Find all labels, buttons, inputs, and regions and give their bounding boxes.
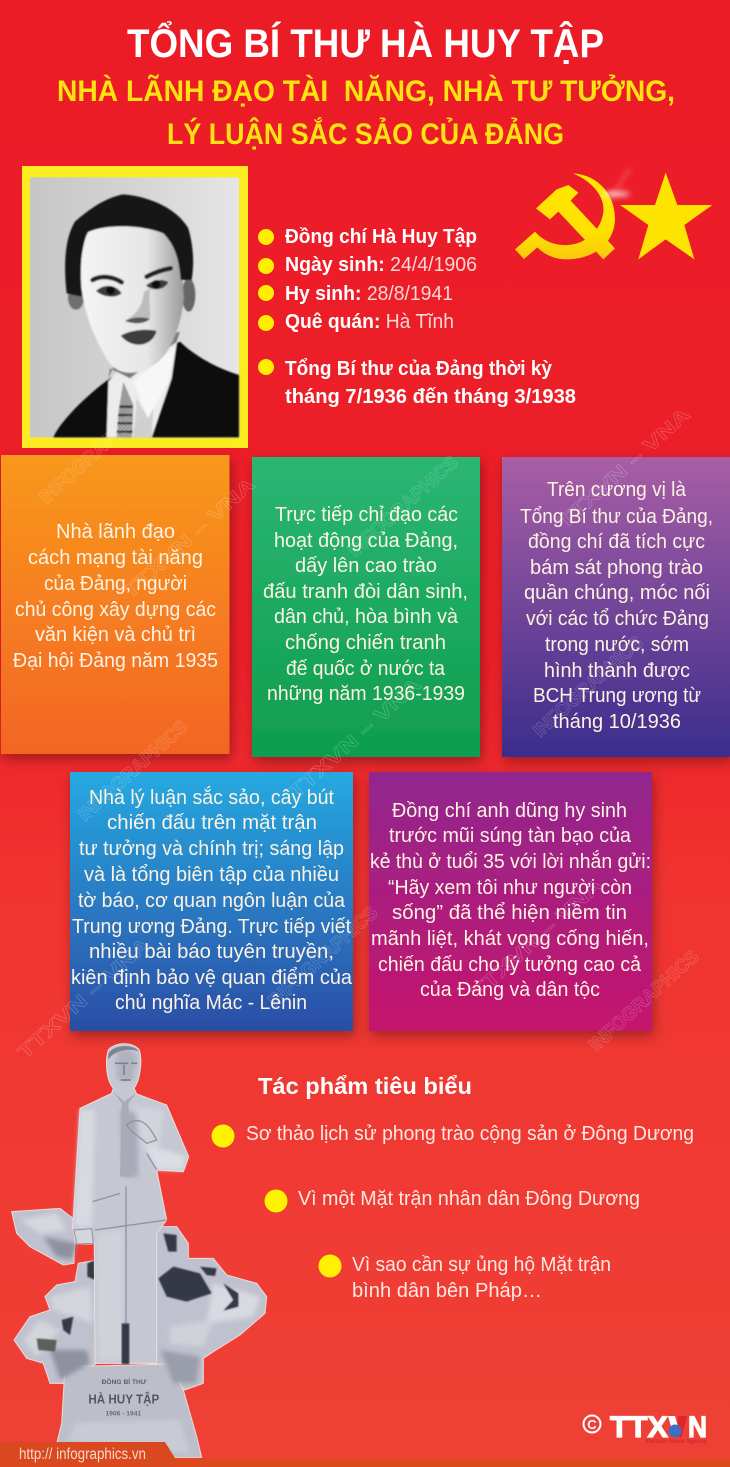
title: LÝ LUẬN SẮC SẢO CỦA ĐẢNG <box>167 117 564 151</box>
profile facts: Hy sinh: 28/8/1941 <box>285 283 453 305</box>
panel: green direction: đế quốc ở nước ta <box>286 657 446 680</box>
panel: blue theorist: và là tổng biên tập của nhiều <box>84 863 339 886</box>
panel: magenta sacrifice: “Hãy xem tôi như người còn <box>388 876 632 899</box>
light flare <box>602 168 630 206</box>
panel: blue theorist: Nhà lý luận sắc sảo, cây bút <box>89 786 334 809</box>
panel: magenta sacrifice: Đồng chí anh dũng hy sinh <box>392 799 627 822</box>
panel: purple general secretary: BCH Trung ương từ <box>533 684 701 707</box>
watermarks: INFOGRAPHICS <box>344 452 462 562</box>
logo: TTXVN: TTX <box>610 1411 668 1444</box>
panel: purple general secretary: trong nước, sớm <box>545 633 689 656</box>
panel: purple general secretary: Trên cương vị là <box>547 478 687 501</box>
watermarks: INFOGRAPHICS <box>74 716 192 826</box>
panel: green direction: Trực tiếp chỉ đạo các <box>275 503 458 526</box>
footer strip <box>0 1442 730 1467</box>
panel: blue theorist: kiên định bảo vệ quan điểm của <box>71 966 353 989</box>
profile facts: Quê quán: Hà Tĩnh <box>285 311 454 333</box>
list: notable works: Sơ thảo lịch sử phong trào cộng sản ở Đông Dương <box>246 1122 694 1145</box>
profile facts: Đồng chí Hà Huy Tập <box>285 226 477 248</box>
list: notable works: Vì sao cần sự ủng hộ Mặt trận <box>352 1253 611 1276</box>
title <box>57 21 675 151</box>
panel: purple general secretary: bám sát phong trào <box>530 556 703 579</box>
list: notable works: bình dân bên Pháp… <box>352 1279 542 1302</box>
panel: green direction: đấu tranh đòi dân sinh, <box>263 580 468 603</box>
title: NHÀ LÃNH ĐẠO TÀI NĂNG, NHÀ TƯ TƯỞNG, <box>57 74 675 108</box>
profile facts: tháng 7/1936 đến tháng 3/1938 <box>285 386 576 408</box>
heading: notable works: Tác phẩm tiêu biểu <box>258 1073 472 1099</box>
panel: green direction: dấy lên cao trào <box>295 554 437 577</box>
panel: blue theorist: Trung ương Đảng. Trực tiếp viết <box>72 915 351 938</box>
watermarks: INFOGRAPHICS <box>585 946 703 1056</box>
panel: green direction: dân chủ, hòa bình và <box>274 605 459 628</box>
watermarks: TTXVN – VNA <box>285 674 426 804</box>
statue of Hà Huy Tập: HÀ HUY TẬP <box>88 1391 160 1406</box>
panel: blue theorist: tư tưởng và chính trị; sáng lập <box>79 837 344 860</box>
panel: orange leader: Đại hội Đảng năm 1935 <box>13 649 218 672</box>
watermarks: INFOGRAPHICS <box>35 399 153 509</box>
icon: hammer and sickle <box>515 173 615 259</box>
watermarks: TTXVN – VNA <box>554 404 695 534</box>
logo: TTXVN: Vietnam News Agency <box>645 1438 707 1445</box>
panel: orange leader <box>1 455 230 754</box>
watermarks: INFOGRAPHICS <box>264 902 382 1012</box>
profile facts <box>258 226 576 408</box>
panel: blue theorist: tờ báo, cơ quan ngôn luận của <box>78 889 346 912</box>
title: TỔNG BÍ THƯ HÀ HUY TẬP <box>127 21 604 66</box>
panel: purple general secretary: hình thành được <box>544 659 690 682</box>
profile facts: Ngày sinh: 24/4/1906 <box>285 254 477 276</box>
list: notable works <box>212 1122 694 1302</box>
statue of Hà Huy Tập: 1906 - 1941 <box>106 1410 141 1417</box>
panel: blue theorist: chiến đấu trên mặt trận <box>107 811 317 834</box>
panel: magenta sacrifice: sống” đã thể hiện niềm tin <box>392 901 627 924</box>
panel: purple general secretary: quần chúng, móc nối <box>524 581 710 604</box>
panel: orange leader: Nhà lãnh đạo <box>56 520 175 543</box>
footer strip: http:// infographics.vn <box>19 1446 146 1463</box>
panel: green direction: những năm 1936-1939 <box>267 682 465 705</box>
watermarks: TTXVN – VNA <box>467 874 608 1004</box>
panel: magenta sacrifice: mãnh liệt, khát vọng cống hiến, <box>371 927 649 950</box>
logo: TTXVN: N <box>688 1411 707 1444</box>
statue of Hà Huy Tập: ĐỒNG BÍ THƯ <box>102 1376 147 1386</box>
watermarks: INFOGRAPHICS <box>529 632 647 742</box>
list: notable works: Vì một Mặt trận nhân dân Đông Dương <box>298 1187 640 1210</box>
panel: blue theorist: chủ nghĩa Mác - Lênin <box>115 991 307 1014</box>
panel: magenta sacrifice: kẻ thù ở tuổi 35 với lời nhắn gửi: <box>370 850 651 873</box>
panel: green direction: hoạt động của Đảng, <box>274 529 458 552</box>
panel: orange leader: văn kiện và chủ trì <box>35 623 196 646</box>
portrait photo with yellow frame <box>22 166 248 448</box>
panel: orange leader: của Đảng, người <box>44 572 187 595</box>
logo: TTXVN <box>584 1411 707 1445</box>
panel: magenta sacrifice <box>369 772 652 1031</box>
panel: green direction: chống chiến tranh <box>285 631 446 654</box>
panel: magenta sacrifice: của Đảng và dân tộc <box>420 978 600 1001</box>
panel: orange leader: chủ công xây dựng các <box>15 598 216 621</box>
panel: magenta sacrifice: chiến đấu cho lý tưởng cao cả <box>378 953 642 976</box>
panel: purple general secretary <box>502 457 730 757</box>
panel: purple general secretary: tháng 10/1936 <box>553 710 681 733</box>
statue of Hà Huy Tập <box>12 1044 267 1457</box>
panel: magenta sacrifice: trước mũi súng tàn bạo của <box>389 824 632 847</box>
panel: blue theorist <box>70 772 353 1031</box>
watermarks: TTXVN – VNA <box>14 934 155 1064</box>
panel: purple general secretary: với các tổ chức Đảng <box>526 607 709 630</box>
icon: gold star <box>620 173 712 259</box>
panel: purple general secretary: Tổng Bí thư của Đảng, <box>520 505 713 528</box>
panel: green direction <box>252 457 480 757</box>
watermarks <box>14 399 703 1064</box>
panel: blue theorist: nhiều bài báo tuyên truyền, <box>89 940 334 963</box>
logo: TTXVN: C <box>587 1417 597 1432</box>
profile facts: Tổng Bí thư của Đảng thời kỳ <box>285 358 553 380</box>
panel: orange leader: cách mạng tài năng <box>28 546 203 569</box>
watermarks: TTXVN – VNA <box>119 474 260 604</box>
panel: purple general secretary: đồng chí đã tích cực <box>528 530 705 553</box>
